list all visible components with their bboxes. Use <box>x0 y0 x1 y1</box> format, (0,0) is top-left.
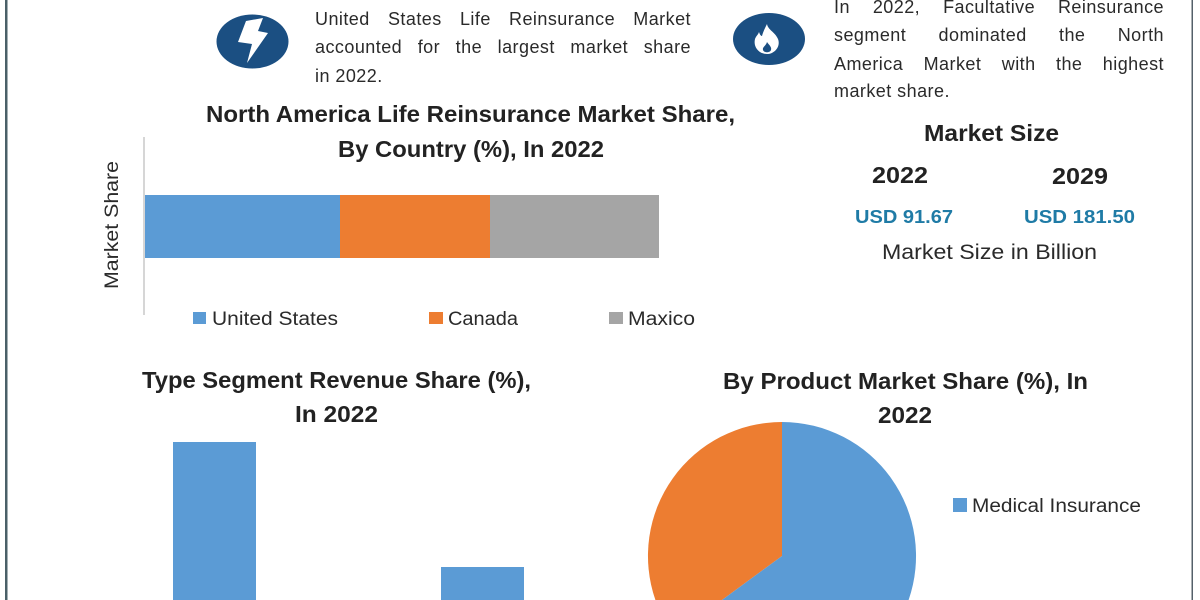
legend: countries: United States <box>212 309 338 330</box>
text block: facultative reinsurance: market share. <box>834 81 950 101</box>
market size panel <box>855 120 1135 264</box>
chart title: by product: By Product Market Share (%), In <box>723 368 1088 394</box>
chart title: by product: 2022 <box>878 402 932 428</box>
chart title: type segment: Type Segment Revenue Share (%), <box>142 367 531 393</box>
stacked bar chart: market share by country <box>102 137 659 315</box>
market size panel: Market Size in Billion <box>882 241 1097 264</box>
chart title: by country: North America Life Reinsurance Market Share, <box>206 101 735 127</box>
icon: flame <box>733 13 805 65</box>
axis label: Market Share <box>102 161 123 289</box>
icon: lightning bolt <box>216 14 288 68</box>
market size panel: USD 181.50 <box>1024 206 1135 227</box>
legend: countries: Maxico <box>628 309 695 330</box>
market size panel: 2029 <box>1052 163 1108 189</box>
pie chart: by product <box>648 422 916 600</box>
chart title: by country <box>206 101 735 162</box>
chart title: by product <box>723 368 1088 428</box>
market size panel: USD 91.67 <box>855 206 953 227</box>
bar chart: type segment <box>173 442 524 600</box>
chart title: type segment: In 2022 <box>295 401 378 427</box>
legend: countries <box>193 309 695 330</box>
text block: facultative reinsurance: America Market with the highest <box>834 54 1164 74</box>
text block: united states share: United States Life Reinsurance Market <box>315 9 691 29</box>
text block: facultative reinsurance: segment dominated the North <box>834 25 1164 45</box>
chart title: by country: By Country (%), In 2022 <box>338 136 604 162</box>
market size panel: Market Size <box>924 120 1059 146</box>
legend: medical insurance: Medical Insurance <box>972 496 1141 517</box>
text block: united states share: in 2022. <box>315 66 383 86</box>
text block: united states share <box>315 9 691 86</box>
text block: united states share: accounted for the largest market share <box>315 37 691 57</box>
legend: countries: Canada <box>448 309 518 330</box>
chart title: type segment <box>142 367 531 427</box>
market size panel: 2022 <box>872 162 928 188</box>
text block: facultative reinsurance <box>834 0 1164 101</box>
